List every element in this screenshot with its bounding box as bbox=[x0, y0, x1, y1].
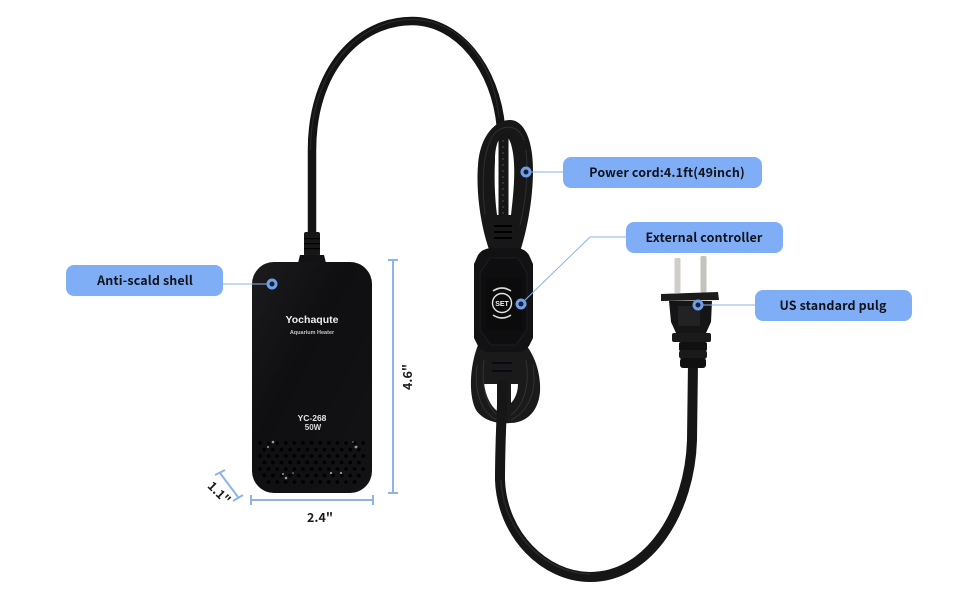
callout: anti-scald shell bbox=[66, 265, 276, 296]
width value: 2.4" bbox=[307, 507, 333, 526]
upper cord loop with central cord bbox=[478, 120, 533, 252]
callout: external controller: External controller bbox=[646, 227, 763, 246]
lower cord loop behind controller bbox=[471, 345, 540, 423]
dimension: width 2.4 inches bbox=[251, 495, 373, 526]
heater body bbox=[252, 262, 372, 493]
height value: 4.6" bbox=[397, 364, 416, 390]
callout: US standard plug bbox=[694, 290, 912, 321]
vent grille bbox=[258, 440, 366, 487]
dimension: height 4.6 inches bbox=[388, 260, 416, 493]
callout: external controller bbox=[517, 222, 783, 308]
external controller bbox=[474, 248, 533, 352]
wattage: 50W bbox=[305, 423, 322, 432]
power cord: upper arc from heater to loop bbox=[310, 20, 501, 236]
US plug bbox=[661, 256, 719, 368]
model number: YC-268 bbox=[298, 413, 327, 423]
power cord: lower run to plug bbox=[500, 362, 693, 577]
dimension: depth 1.1 inches bbox=[204, 470, 243, 508]
callout: anti-scald shell: Anti-scald shell bbox=[96, 270, 193, 289]
SET button: SET bbox=[495, 301, 510, 308]
callout: power cord: Power cord:4.1ft(49inch) bbox=[589, 162, 745, 181]
callout: US standard plug: US standard pulg bbox=[779, 295, 887, 314]
depth value: 1.1" bbox=[204, 476, 236, 508]
brand name: Yochaqute bbox=[286, 314, 339, 326]
controller strain reliefs bbox=[488, 216, 516, 384]
product type: Aquarium Heater bbox=[290, 330, 335, 336]
heater strain relief bbox=[298, 232, 326, 263]
callout: power cord bbox=[522, 157, 762, 188]
vent specks bbox=[267, 441, 357, 479]
